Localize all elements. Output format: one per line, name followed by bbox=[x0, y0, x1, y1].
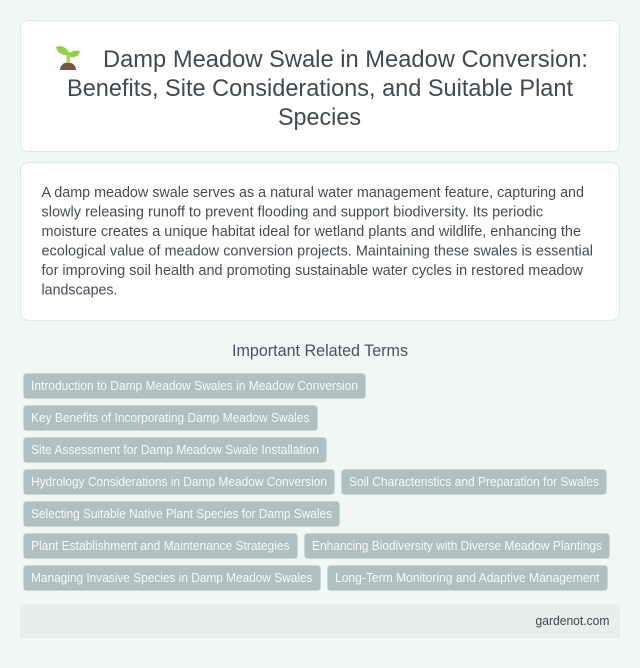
tag: site assessment: Site Assessment for Damp Meadow Swale Installation bbox=[31, 442, 319, 457]
tag: monitoring: Long-Term Monitoring and Adaptive Management bbox=[335, 570, 600, 585]
footer: source text: gardenot.com bbox=[536, 613, 610, 628]
title: Benefits, Site Considerations, and Suitable Plant bbox=[67, 75, 573, 102]
tag: hydrology: Hydrology Considerations in Damp Meadow Conversion bbox=[31, 474, 327, 489]
tag: establishment bbox=[24, 534, 298, 558]
text block: description: slowly releasing runoff to prevent flooding and support biodiversity. Its periodic bbox=[42, 204, 543, 220]
tag: key benefits: Key Benefits of Incorporating Damp Meadow Swales bbox=[31, 410, 310, 425]
text block: description: ecological value of meadow conversion projects. Maintaining these swales is essential bbox=[42, 242, 593, 260]
tag: site assessment bbox=[24, 438, 326, 462]
tag: hydrology bbox=[24, 470, 334, 494]
tag: invasive species bbox=[24, 566, 320, 590]
heading: related terms: Important Related Terms bbox=[232, 342, 408, 360]
tag: native plants bbox=[24, 502, 340, 526]
text block: description: landscapes. bbox=[42, 282, 118, 298]
tag: introduction bbox=[24, 374, 366, 398]
tag: native plants: Selecting Suitable Native Plant Species for Damp Swales bbox=[31, 506, 332, 521]
tag: introduction: Introduction to Damp Meadow Swales in Meadow Conversion bbox=[31, 378, 358, 393]
panel: title card bbox=[20, 20, 620, 152]
panel: description bbox=[20, 162, 620, 320]
tag: establishment: Plant Establishment and Maintenance Strategies bbox=[31, 538, 290, 553]
tag: monitoring bbox=[328, 566, 608, 590]
tag: biodiversity bbox=[304, 534, 610, 558]
tags: related terms bbox=[24, 374, 610, 590]
title: Damp Meadow Swale in Meadow Conversion: bbox=[103, 46, 588, 73]
tag: invasive species: Managing Invasive Species in Damp Meadow Swales bbox=[31, 570, 312, 585]
text block: description bbox=[42, 184, 593, 298]
tag: soil: Soil Characteristics and Preparation for Swales bbox=[349, 474, 599, 489]
tag: soil bbox=[342, 470, 606, 494]
footer bbox=[20, 604, 620, 638]
text block: description: for improving soil health and promoting sustainable water cycles in restored meadow bbox=[42, 262, 583, 279]
icon: seedling bbox=[56, 46, 80, 70]
tag: biodiversity: Enhancing Biodiversity with Diverse Meadow Plantings bbox=[312, 538, 602, 553]
text block: description: moisture creates a unique habitat ideal for wetland plants and wildlife, enhancing the bbox=[42, 223, 581, 240]
title: Species bbox=[278, 104, 361, 131]
title bbox=[67, 46, 588, 131]
tag: key benefits bbox=[24, 406, 318, 430]
text block: description: A damp meadow swale serves as a natural water management feature, capturing and bbox=[42, 184, 584, 201]
